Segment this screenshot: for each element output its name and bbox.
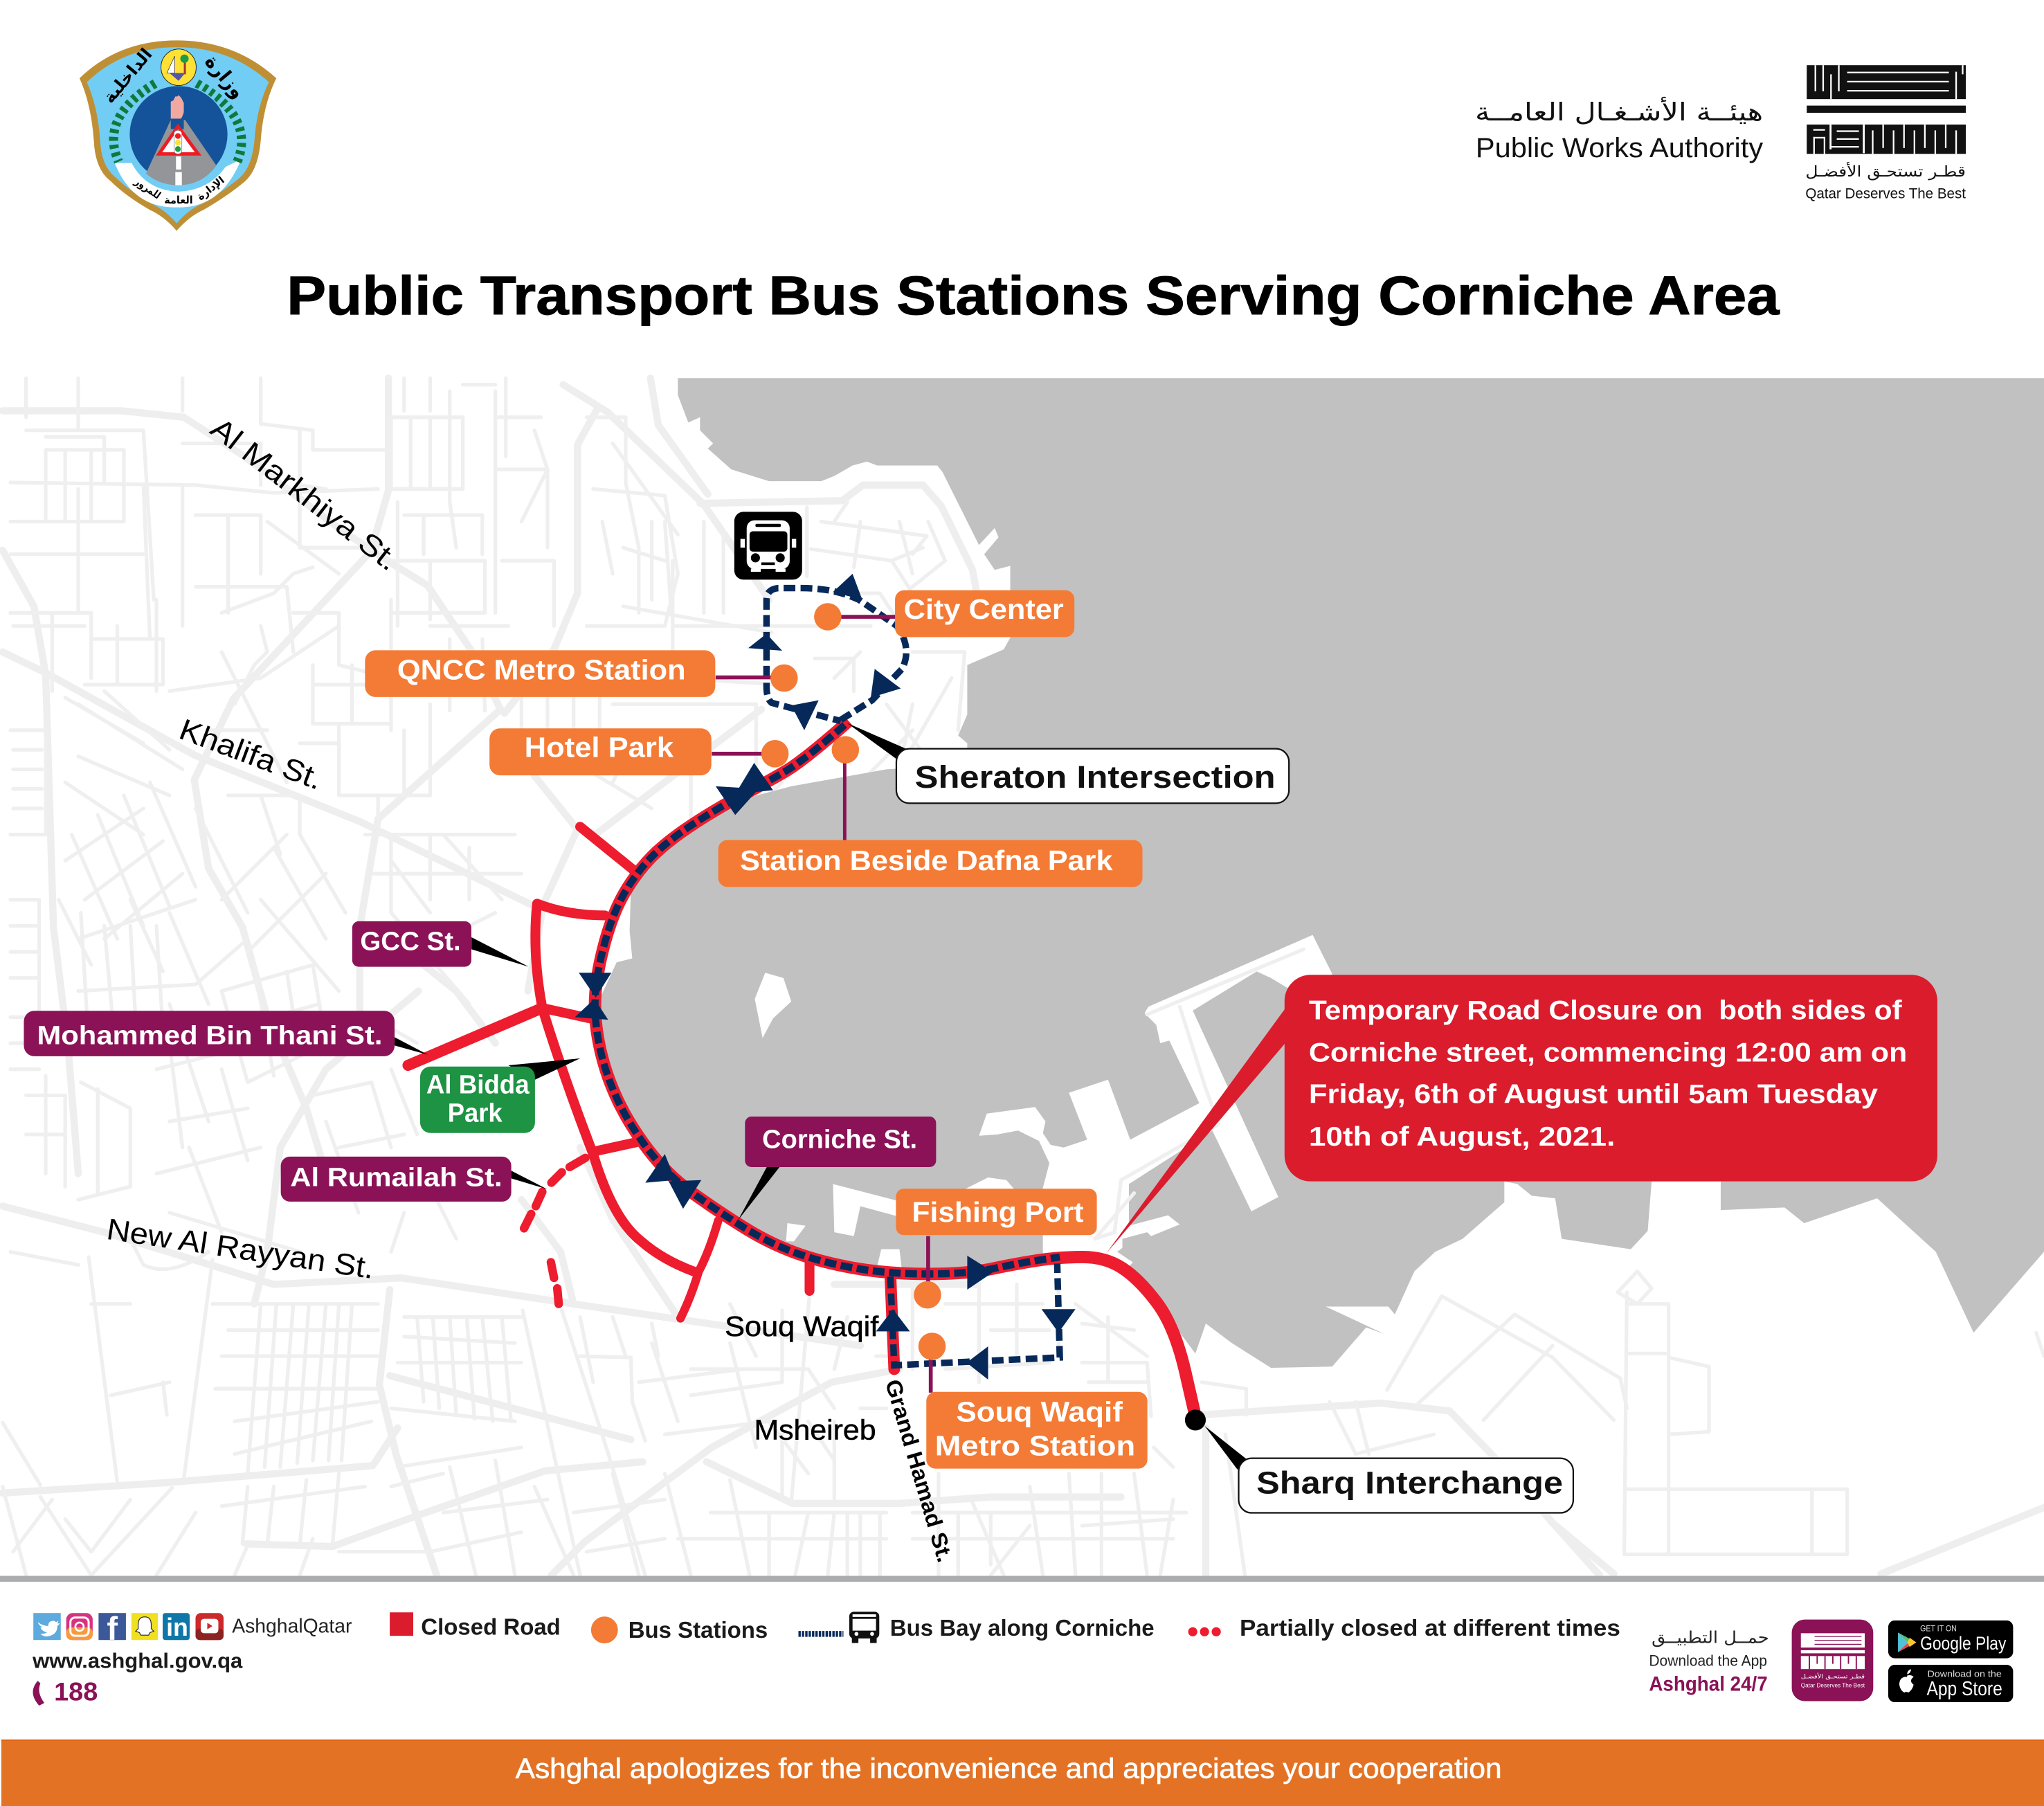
website: www.ashghal.gov.qa [32,1650,243,1672]
station label: Hotel Park: Hotel Park [525,732,674,764]
station label: Souq Waqif Metro Station: Souq Waqif [956,1396,1123,1427]
callout: temporary road closure notice: Temporary Road Closure on both sides of [1309,995,1902,1025]
emblem: General Directorate of Traffic logo: العامة [164,194,193,206]
callout: temporary road closure notice [1107,975,1937,1253]
bus route dashed along Corniche [595,725,1060,1274]
logo: Ashghal kufic mark and slogan: قطـر تستحـق الأفضـل [1805,162,1966,181]
hotline 188 [33,1677,98,1706]
park label: Al Bidda Park: Park [448,1099,503,1128]
download the app text: حمــل التطبيــق [1652,1628,1769,1647]
station label: Station Beside Dafna Park [718,840,1143,887]
social media icons: f [107,1610,118,1647]
callout: Sheraton Intersection: Sheraton Intersection [915,759,1276,795]
port roads [1095,949,1303,1239]
social media icons [33,1610,224,1647]
callout: temporary road closure notice: Friday, 6th of August until 5am Tuesday [1309,1080,1878,1110]
legend: bus bay along Corniche: Bus Bay along Corniche [890,1615,1155,1641]
street label: Khalifa St.: Khalifa St. [175,713,327,797]
leader lines to stations [712,617,931,1393]
street tag: Mohammed Bin Thani St. [24,1011,428,1056]
street label: Grand Hamad St.: Grand Hamad St. [880,1377,958,1565]
icon: Ashghal app [1792,1620,1873,1701]
emblem: General Directorate of Traffic logo: للمرور [132,174,163,201]
station label: Souq Waqif Metro Station: Metro Station [935,1429,1135,1461]
logo: Ashghal kufic mark and slogan: Qatar Deserves The Best [1805,184,1966,201]
badge: App Store: App Store [1927,1677,2002,1699]
legend: bus stations: Bus Stations [628,1617,768,1643]
emblem: General Directorate of Traffic logo: وزارة [200,51,250,103]
street tag: Mohammed Bin Thani St.: Mohammed Bin Thani St. [37,1021,383,1050]
station label: City Center [895,590,1074,637]
legend: bus bay along Corniche [799,1611,1155,1643]
station label: Fishing Port: Fishing Port [912,1196,1084,1228]
legend: partially closed: Partially closed at different times [1240,1615,1620,1641]
bus station markers [761,603,946,1360]
badge: App Store [1888,1665,2013,1702]
emblem: General Directorate of Traffic logo [80,40,276,231]
street tag: GCC St. [352,921,529,967]
station label: Hotel Park [489,728,712,775]
title: Public Transport Bus Stations Serving Corniche Area [287,264,1780,326]
street label: New Al Rayyan St.: New Al Rayyan St. [105,1213,377,1285]
station label: Souq Waqif Metro Station [926,1392,1148,1469]
direction arrows [575,574,1076,1380]
header: Public Works Authority name: هيئــة الأشـغـال العامــة [1475,96,1763,127]
footer banner: Ashghal apologizes for the inconvenience and appreciates your cooperation [516,1752,1502,1785]
logo: Ashghal kufic mark and slogan [1805,65,1966,201]
legend: closed road: Closed Road [421,1614,561,1640]
social handle: AshghalQatar [232,1614,352,1636]
street label: Al Markhiya St.: Al Markhiya St. [204,411,405,577]
social media icons: in [166,1614,188,1641]
place label: Msheireb: Msheireb [754,1414,876,1446]
footer banner [1,1740,2044,1806]
badge: Google Play [1888,1620,2013,1659]
closed roads: side streets [408,827,894,1369]
emblem: General Directorate of Traffic logo: الداخلية [99,44,156,107]
partially closed road dashes [524,1158,586,1304]
street tag: Al Rumailah St. [281,1157,548,1202]
hotline 188: 188 [54,1677,98,1706]
download the app text: Download the App [1649,1652,1767,1670]
station label: Station Beside Dafna Park: Station Beside Dafna Park [740,845,1113,876]
Corniche Street closed road [595,721,1195,1416]
station label: Fishing Port [896,1189,1097,1235]
street tag: Corniche St. [738,1117,936,1220]
emblem: General Directorate of Traffic logo: الإدارة [195,174,227,203]
callout: Sharq Interchange [1185,1409,1573,1513]
header: Public Works Authority name: Public Works Authority [1476,133,1763,163]
callout: Sharq Interchange: Sharq Interchange [1256,1465,1563,1500]
callout: Sheraton Intersection [847,723,1289,803]
street tag: Corniche St.: Corniche St. [762,1125,917,1154]
download the app text [1649,1628,1769,1695]
callout: temporary road closure notice: Corniche street, commencing 12:00 am on [1309,1038,1907,1067]
download the app text: Ashghal 24/7 [1649,1673,1768,1695]
badge: App Store: Download on the [1927,1669,2002,1679]
place label: Souq Waqif: Souq Waqif [725,1310,879,1342]
callout: temporary road closure notice: 10th of August, 2021. [1309,1122,1615,1152]
land: port and piers [754,935,1332,1291]
park label: Al Bidda Park: Al Bidda [426,1070,530,1099]
bus route along Grand Hamad St. and back [890,1263,1060,1365]
street network [3,378,2044,1575]
map panel [3,378,2044,1575]
badge: Google Play: Google Play [1920,1633,2007,1654]
park label: Al Bidda Park [420,1058,580,1133]
bus route loop at City Center [766,588,906,721]
icon: bus stop sign [734,512,802,579]
icon: Ashghal app: Qatar Deserves The Best [1801,1682,1865,1689]
street tag: Al Rumailah St.: Al Rumailah St. [290,1162,503,1191]
icon: Ashghal app: قطـر تستحـق الأفضـل [1801,1672,1865,1679]
street tag: GCC St.: GCC St. [360,926,461,955]
sea [598,378,2044,1368]
badge: Google Play: GET IT ON [1920,1624,1957,1634]
station label: QNCC Metro Station [365,650,715,697]
station label: City Center: City Center [904,593,1064,625]
footer divider [0,1576,2044,1582]
header: Public Works Authority name [1475,96,1763,163]
station label: QNCC Metro Station: QNCC Metro Station [397,653,686,685]
